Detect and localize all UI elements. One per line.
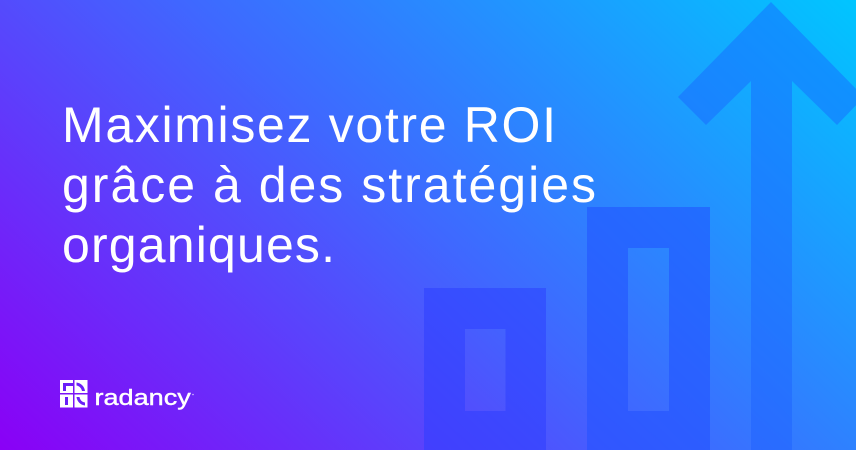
arrow (678, 2, 856, 450)
chart: rising bars and arrow (424, 2, 856, 450)
bar: tall (587, 207, 710, 450)
logo mark (60, 380, 88, 408)
title: organiques. (62, 217, 335, 273)
logo: radancy (60, 380, 194, 410)
title: Maximisez votre ROI (62, 97, 556, 153)
title (62, 97, 596, 273)
title: grâce à des stratégies (62, 157, 596, 213)
bar: short (424, 288, 546, 450)
wordmark: radancy (94, 386, 191, 410)
trademark dot (192, 394, 194, 395)
